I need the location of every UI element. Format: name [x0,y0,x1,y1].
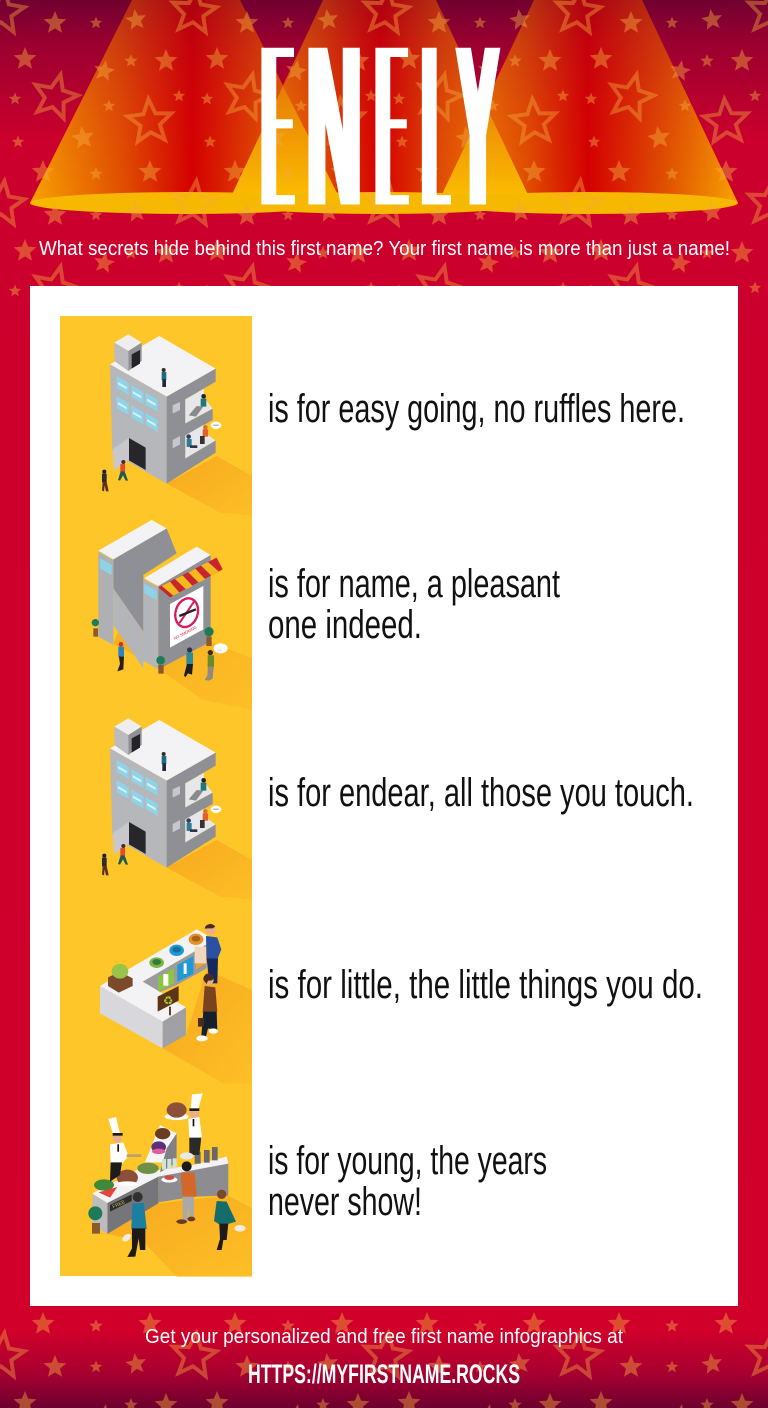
speech bubble [214,643,228,653]
text: Y lines [268,1139,547,1224]
customer: orange shirt [161,1152,197,1224]
counter: FREE [112,1199,127,1210]
panel: yellow illustration column [60,316,252,1276]
text: Y lines: never show! [268,1180,422,1224]
person: brown jacket [196,974,218,1041]
spotlights [30,0,738,203]
text: N lines [268,562,560,647]
text: N lines: is for name, a pleasant [268,562,560,606]
title [264,0,498,261]
icon: letter Y buffet [88,1093,252,1277]
footer text: Get your personalized and free first name infographics at [145,1326,623,1348]
person: blue shirt [195,924,221,983]
recycle sign: ♻ [163,996,173,1008]
icon: letter E building [102,334,252,516]
spotlight floor ellipses [30,192,738,214]
customer: woman [214,1190,246,1250]
subtitle: What secrets hide behind this first name? Your first name is more than just a name! [39,238,730,260]
bins [149,934,207,992]
customer: teal back [121,1192,147,1257]
star pattern: top [0,0,768,300]
speech bubble: ... [217,647,222,653]
food [94,1128,218,1198]
icon: second letter E building [102,718,252,900]
footer url: HTTPS://MYFIRSTNAME.ROCKS [248,1359,520,1389]
planter [108,964,133,993]
title: Y [458,0,498,261]
panel: white card [30,286,738,1306]
chef: left [108,1117,141,1182]
icon: letter N building [92,520,252,710]
recycle sign [158,986,179,1015]
text: N lines: one indeed. [268,603,422,647]
star pattern: bottom [0,1300,768,1408]
no smoking poster: NO SMOKING [173,625,197,641]
plant [88,1206,102,1234]
icon: letter L recycling counter [100,924,252,1083]
text: Y lines: is for young, the years [268,1139,547,1183]
awning [158,558,223,597]
counter [92,1125,228,1234]
plants [92,619,214,674]
people [117,642,214,681]
no smoking poster [170,586,203,648]
chef: right with platter [165,1093,203,1155]
